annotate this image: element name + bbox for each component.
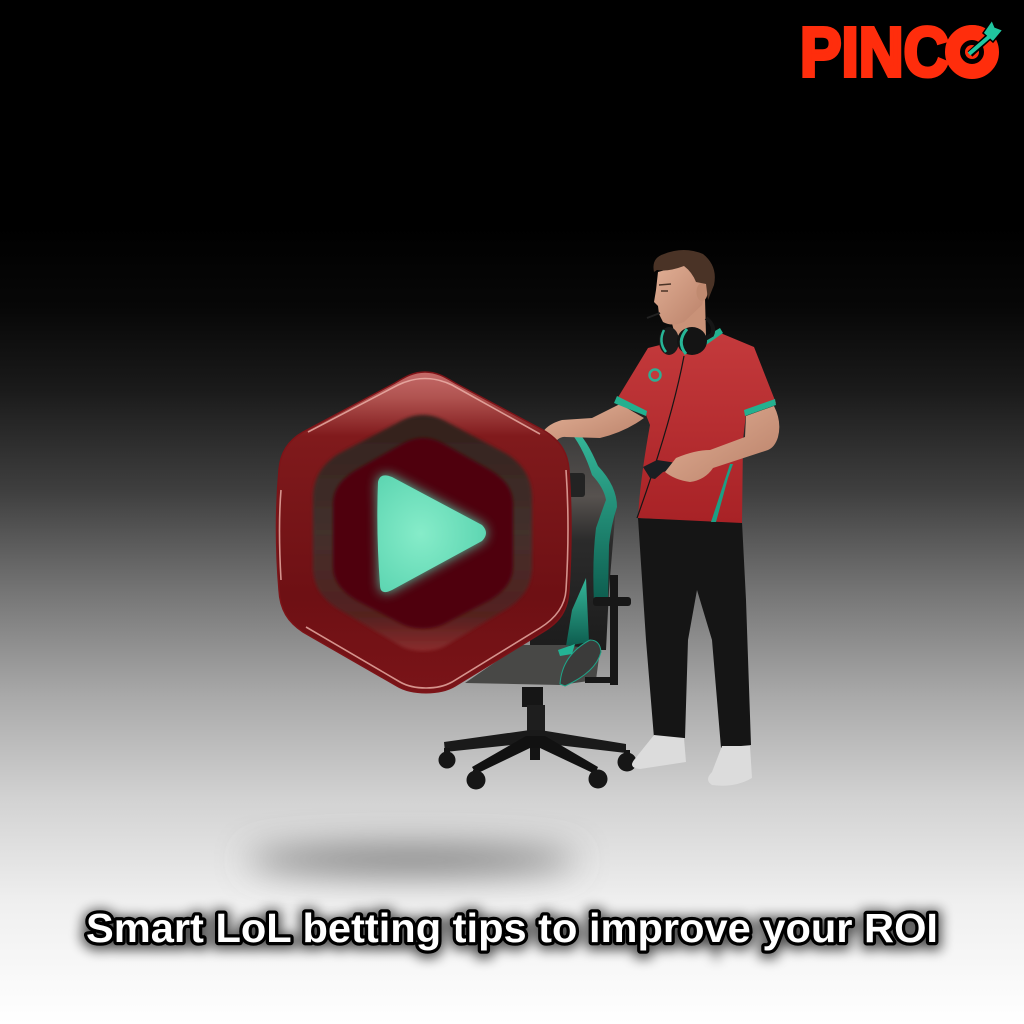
play triangle [377,475,486,592]
left arm [543,404,644,446]
trousers [638,518,751,748]
icon: target ring [952,32,992,72]
controller [643,460,678,479]
chair headrest slot [568,473,585,497]
shoes [632,735,752,786]
icon: arrow [969,20,1003,54]
chair seat [465,645,600,685]
logo: PINCO: PINCO [800,13,997,91]
headset mic [647,313,660,318]
hexagon highlights [280,378,568,688]
caption: Smart LoL betting tips to improve your ROI [86,905,938,951]
shirt teal trims [614,328,776,522]
hexagon core [333,438,513,628]
floor shadow [247,847,577,873]
man [543,250,779,786]
chair teal trim [572,431,617,603]
eyebrow and eye [659,284,671,291]
chair [438,431,636,790]
play glow [378,475,486,592]
caption shadow: Smart LoL betting tips to improve your ROI [86,907,938,953]
hair [653,250,715,300]
chair seat cushion [560,640,601,686]
shirt badge [650,370,660,380]
cable [637,356,684,518]
ear [696,283,708,301]
neck [670,298,706,346]
chair backrest [530,431,616,650]
headphones [659,318,713,355]
play hexagon [276,372,571,693]
head [654,262,708,324]
chair lower back panel teal [566,578,589,646]
hexagon ring [313,415,532,651]
shirt [617,332,776,523]
right arm [665,406,779,482]
hexagon outer body [276,372,571,693]
chair base [438,687,636,790]
chair armrest [585,575,631,685]
